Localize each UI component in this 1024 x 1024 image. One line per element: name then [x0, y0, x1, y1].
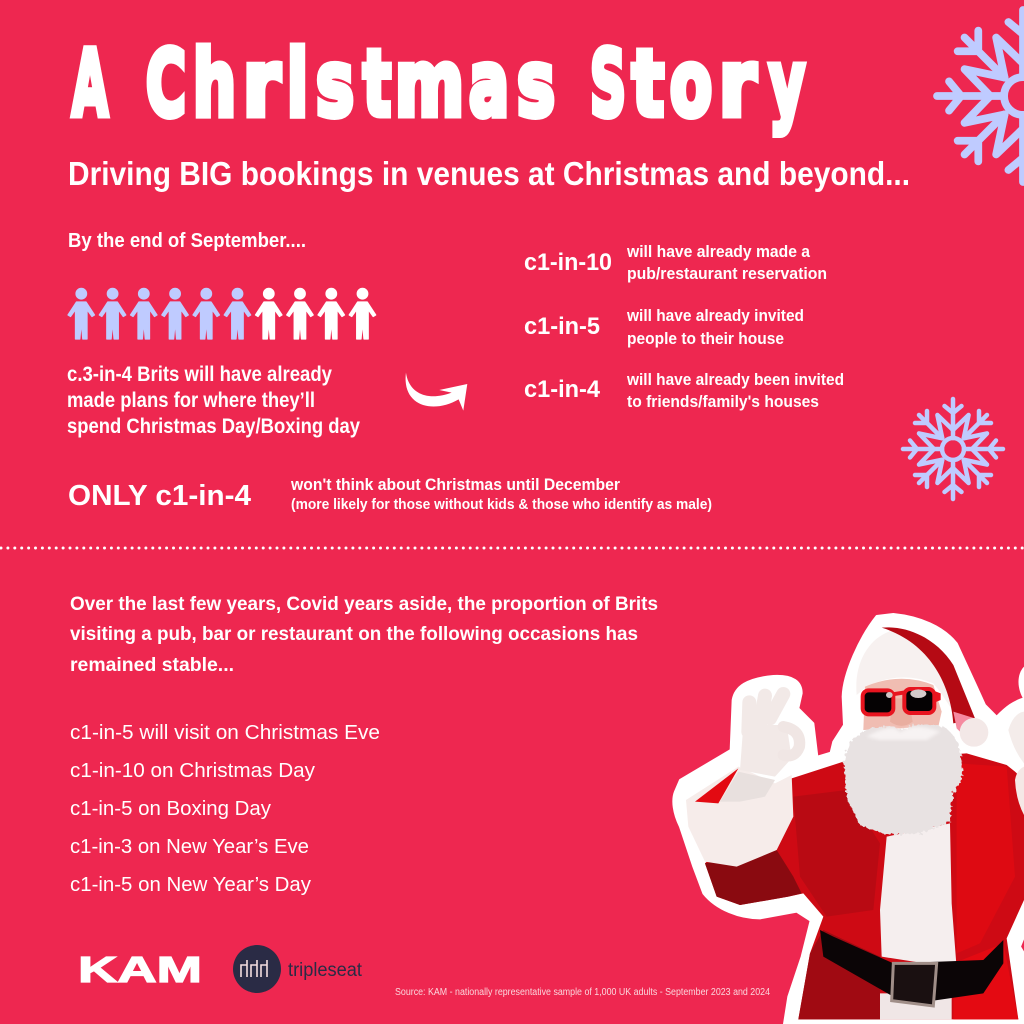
title: i — [287, 32, 308, 137]
text: intro paragraph — [70, 594, 658, 676]
list: occasions: c1-in-5 on Boxing Day — [70, 798, 271, 820]
logo: tripleseat: tripleseat — [288, 960, 363, 981]
text: intro paragraph: remained stable... — [70, 655, 234, 676]
stat: c1-in-5: c1-in-5 — [524, 313, 600, 340]
text: c.3-in-4 Brits: made plans for where they’ll — [67, 389, 315, 412]
title: r — [719, 32, 756, 137]
stat: c1-in-5: will have already invited — [626, 306, 804, 325]
text: won't think about Christmas: won't think about Christmas until December — [290, 476, 621, 494]
title: A — [72, 32, 108, 137]
title: r — [243, 32, 280, 137]
stat: c1-in-10 — [524, 242, 827, 283]
subtitle: Driving BIG bookings in venues at Christmas and beyond... — [68, 155, 910, 192]
stat: c1-in-5: people to their house — [627, 329, 784, 348]
text: won't think about Christmas — [290, 476, 712, 513]
title: h — [193, 32, 236, 137]
title: t — [363, 32, 391, 137]
title: o — [670, 32, 712, 137]
stat: c1-in-10: c1-in-10 — [524, 249, 612, 276]
icon: small snowflake — [903, 399, 1003, 499]
stat: c1-in-4: c1-in-4 — [524, 376, 601, 403]
logo: tripleseat — [233, 945, 363, 993]
stat: c1-in-4: to friends/family's houses — [627, 392, 819, 411]
title: S — [590, 32, 626, 137]
text: intro paragraph: visiting a pub, bar or restaurant on the following occasions has — [70, 624, 638, 645]
stat: c1-in-4 — [524, 370, 844, 411]
title: m — [395, 32, 464, 137]
stat: only c1-in-4: ONLY c1-in-4 — [68, 480, 251, 512]
title: s — [316, 32, 354, 137]
logo: KAM: KAM — [78, 949, 202, 990]
arrow: curved right — [406, 373, 467, 411]
list: occasions: c1-in-10 on Christmas Day — [70, 760, 315, 782]
icon: large snowflake — [937, 10, 1024, 182]
list: occasions: c1-in-3 on New Year’s Eve — [70, 836, 309, 858]
source note: Source: KAM - nationally representative sample of 1,000 UK adults - September 2023 and 2024 — [395, 987, 770, 998]
title: s — [517, 32, 555, 137]
text: won't think about Christmas: (more likely for those without kids & those who identify as male) — [291, 497, 712, 513]
list: occasions — [70, 722, 380, 896]
title: C — [146, 32, 186, 137]
illustration: Santa with sunglasses — [673, 614, 1024, 1024]
text: intro paragraph: Over the last few years, Covid years aside, the proportion of Brits — [70, 594, 658, 615]
text: c.3-in-4 Brits: c.3-in-4 Brits will have already — [67, 363, 332, 386]
text: c.3-in-4 Brits: spend Christmas Day/Boxing day — [67, 415, 360, 438]
list: occasions: c1-in-5 will visit on Christmas Eve — [70, 722, 380, 744]
stat: c1-in-10: pub/restaurant reservation — [627, 264, 827, 283]
title: t — [632, 32, 664, 137]
list: occasions: c1-in-5 on New Year’s Day — [70, 874, 311, 896]
title: a — [469, 32, 509, 137]
stat: c1-in-5 — [524, 306, 804, 348]
stat: c1-in-4: will have already been invited — [626, 370, 844, 389]
pictogram: ten people, six highlighted — [68, 288, 376, 339]
stat: c1-in-10: will have already made a — [626, 242, 810, 261]
title: y — [769, 32, 805, 137]
text: by the end of September: By the end of September.... — [68, 230, 306, 252]
text: c.3-in-4 Brits — [67, 363, 360, 438]
